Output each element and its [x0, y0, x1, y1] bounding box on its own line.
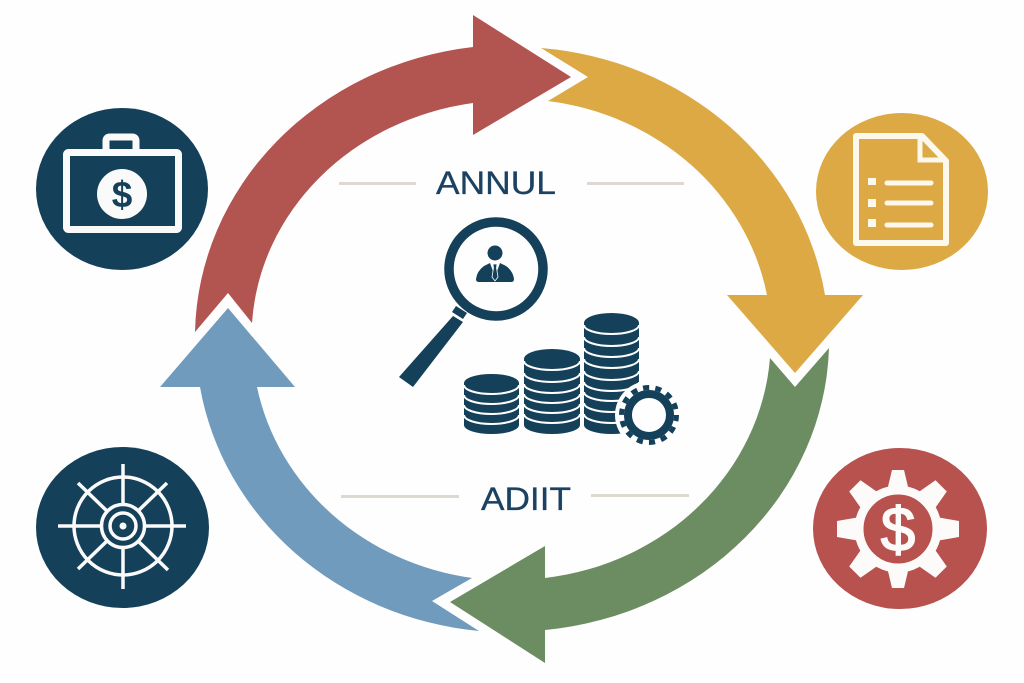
icon: briefcase with dollar badge: $ — [112, 174, 133, 215]
icon: small gear — [615, 381, 683, 449]
coin stack: short — [464, 374, 519, 434]
arrow: yellow cycle arrow — [541, 48, 863, 373]
heading: ANNUL — [339, 165, 684, 201]
icon: ship wheel target — [36, 447, 209, 608]
arrow: blue cycle arrow — [160, 308, 479, 631]
heading: ANNUL: ANNUL — [436, 165, 556, 201]
coin stack: tall — [584, 313, 639, 434]
icon: coin stacks with gear — [464, 313, 683, 449]
icon: document checklist — [816, 113, 988, 270]
heading: ADIIT — [341, 481, 689, 517]
icon: briefcase with dollar badge — [36, 108, 208, 270]
icon: gear with dollar sign: $ — [881, 496, 915, 565]
arrow: red cycle arrow — [195, 15, 571, 332]
heading: ADIIT: ADIIT — [481, 481, 571, 517]
coin stack: medium — [524, 349, 580, 434]
icon: magnifying glass over person — [399, 222, 543, 387]
icon: gear with dollar sign — [813, 448, 987, 609]
arrow: green cycle arrow — [450, 348, 829, 663]
